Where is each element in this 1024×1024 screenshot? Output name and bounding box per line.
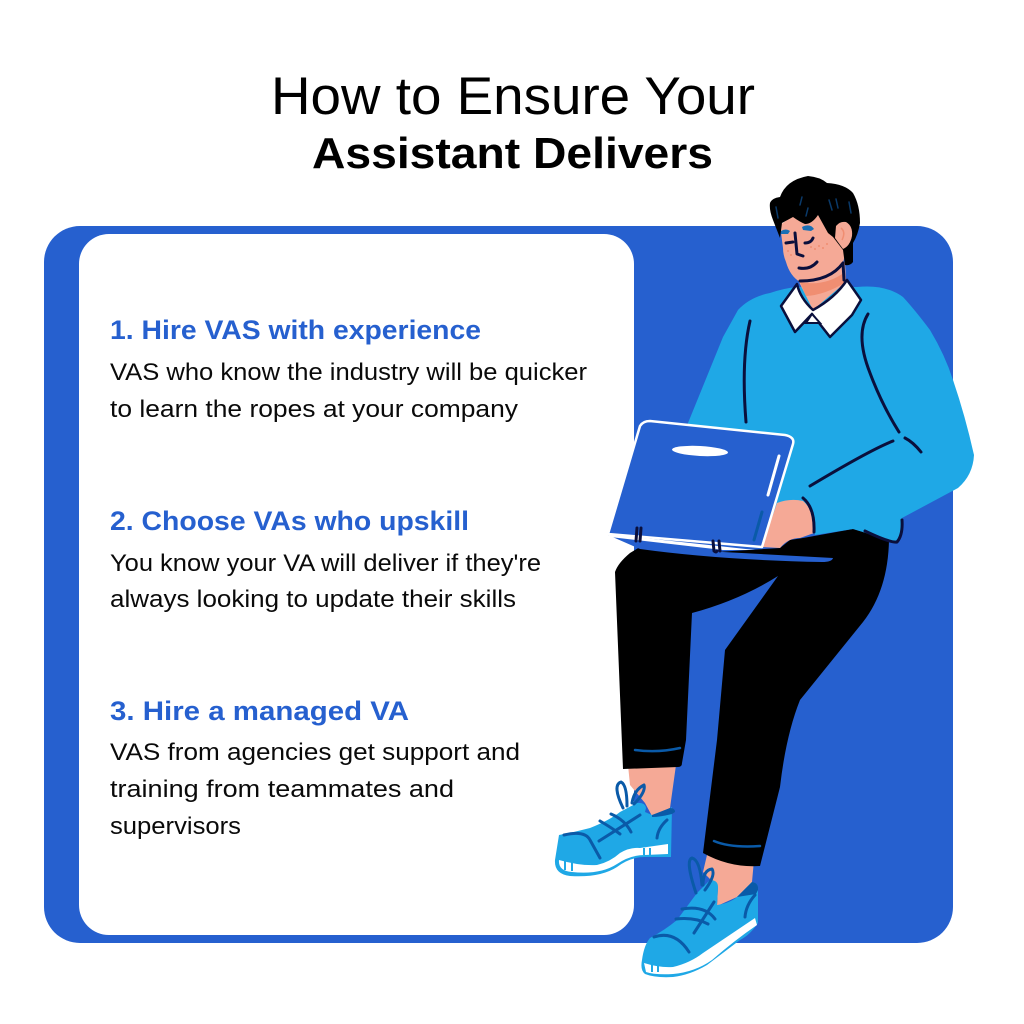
item 3: hire a managed VA: 3. Hire a managed VA [110,696,409,726]
face [780,215,845,282]
laptop highlights [672,445,728,457]
title: Assistant Delivers [312,129,713,178]
item 3: hire a managed VA [110,696,520,840]
item 2: choose VAs who upskill: 2. Choose VAs who upskill [110,506,469,536]
shirt collar [781,280,861,337]
sweater fold lines [744,314,921,542]
nose and mouth [795,233,803,256]
ear [835,222,852,249]
item 1: hire VAs with experience: VAS who know the industry will be quicker [110,359,587,386]
item 3: hire a managed VA: supervisors [110,813,241,840]
item 3: hire a managed VA: VAS from agencies get support and [110,739,520,766]
freckles [787,243,828,256]
hand [762,500,814,548]
illustration: man sitting with laptop [555,176,974,977]
hair [770,176,860,265]
skin: ankles [628,765,754,906]
item 2: choose VAs who upskill: You know your VA will deliver if they're [110,550,541,577]
eyes and brows [781,225,814,243]
left shoe [555,782,675,876]
title [271,67,755,178]
laptop screen [608,421,793,547]
item 3: hire a managed VA: training from teammates and [110,776,454,803]
white text panel [79,234,634,935]
right shoe [641,858,758,977]
hair strands [776,197,851,218]
item 1: hire VAs with experience: to learn the ropes at your company [110,396,518,423]
item 1: hire VAs with experience [110,315,587,423]
item 1: hire VAs with experience: 1. Hire VAS with experience [110,315,481,345]
black trousers [615,529,889,866]
neck [797,262,846,310]
blue background panel [44,226,953,943]
trouser cuff lines [635,748,760,846]
laptop [608,421,833,562]
item 2: choose VAs who upskill: always looking to update their skills [110,586,516,613]
sweater [660,286,974,543]
laptop base [608,535,833,562]
item 2: choose VAs who upskill [110,506,541,613]
title: How to Ensure Your [271,67,755,126]
laptop clips [636,528,720,552]
